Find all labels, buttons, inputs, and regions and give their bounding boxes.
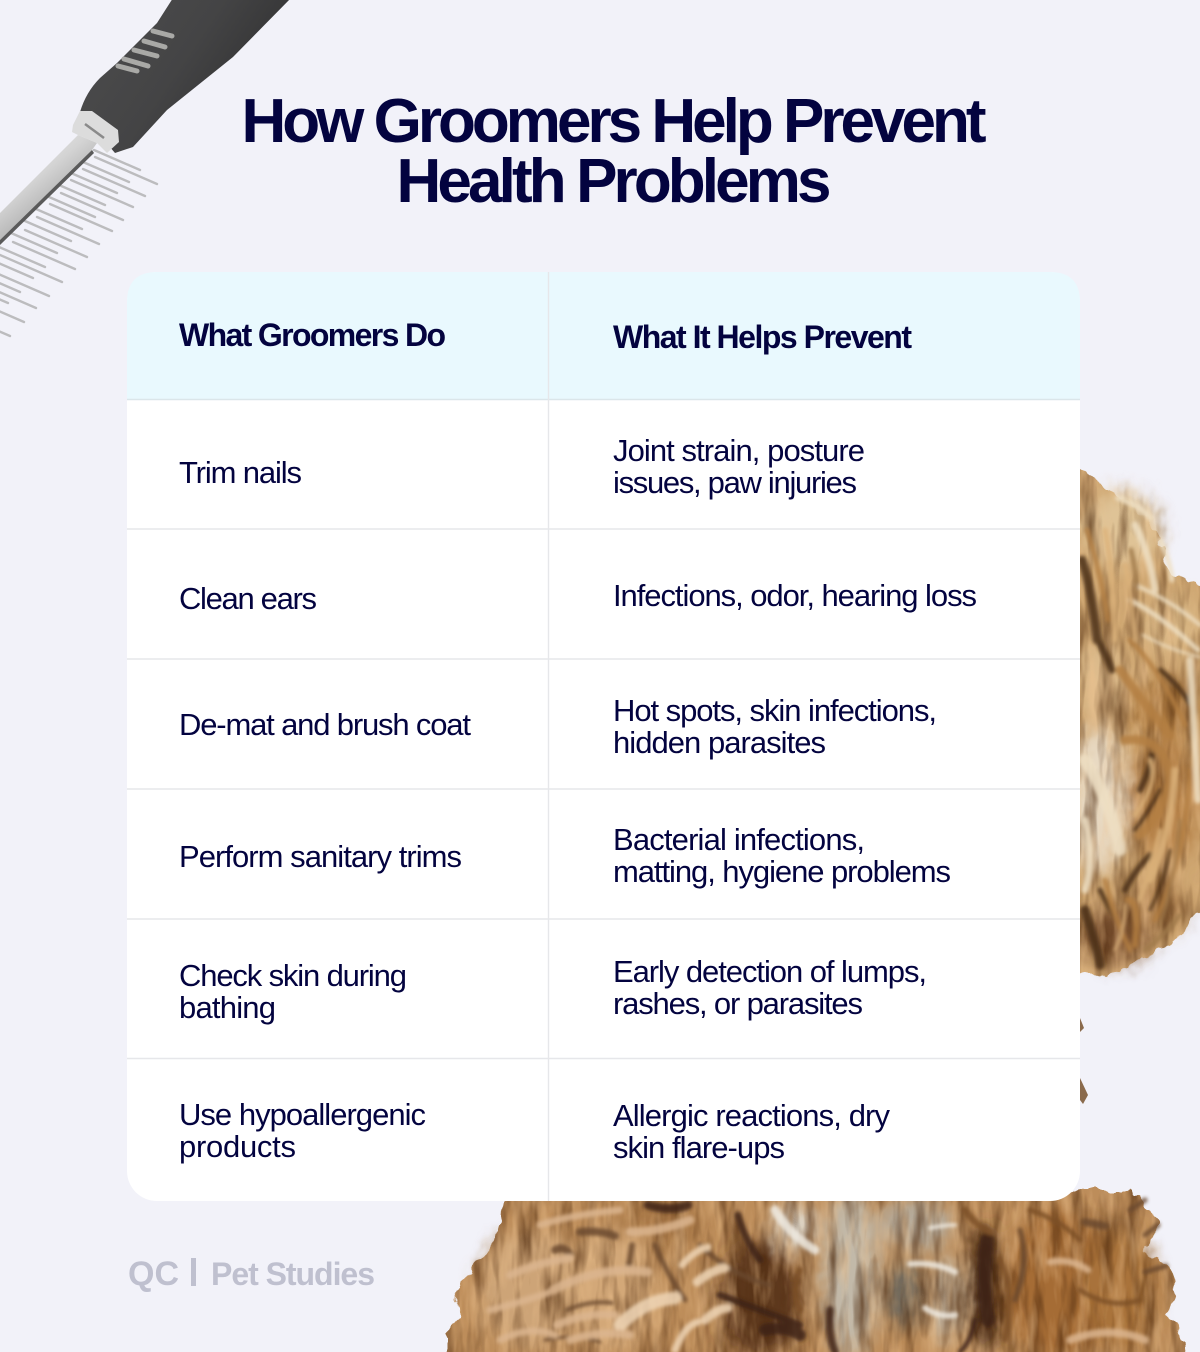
logo: QC Pet Studies [128,1255,375,1293]
title [242,87,986,216]
row: use hypoallergenic products: Allergic reactions, dry [613,1098,890,1133]
row: trim nails: Joint strain, posture [613,433,865,468]
fur tufts [1080,1018,1088,1104]
handle grip ridges [118,31,172,71]
table background [127,272,1080,1201]
table card [127,272,1080,1201]
row: clean ears: Clean ears [179,581,317,616]
table header band [127,272,1080,399]
row: trim nails: Trim nails [179,455,302,490]
row: de-mat and brush coat: De-mat and brush coat [179,707,471,742]
row: check skin during bathing: bathing [179,990,276,1025]
row: clean ears [179,578,977,616]
row: check skin during bathing: rashes, or parasites [613,986,863,1021]
dog fur: right side [1080,469,1200,1104]
logo: QC Pet Studies: Pet Studies [211,1256,375,1292]
row: trim nails: issues, paw injuries [613,465,857,500]
fur strands: right side [1082,498,1200,965]
row: clean ears: Infections, odor, hearing loss [613,578,977,613]
row: perform sanitary trims: Perform sanitary trims [179,839,462,874]
row: de-mat and brush coat: Hot spots, skin infections, [613,693,937,728]
row: use hypoallergenic products: products [179,1129,296,1164]
row: perform sanitary trims: matting, hygiene problems [613,854,951,889]
comb [0,0,291,336]
row: trim nails [179,433,865,500]
table header band: What Groomers Do [179,317,446,353]
row: de-mat and brush coat: hidden parasites [613,725,826,760]
row: check skin during bathing [179,954,927,1025]
row: use hypoallergenic products: Use hypoallergenic [179,1097,426,1132]
dog fur: bottom [445,1190,1187,1352]
row: use hypoallergenic products [179,1097,890,1165]
fur strands: bottom [490,1200,1166,1352]
row: use hypoallergenic products: skin flare-ups [613,1130,785,1165]
row: de-mat and brush coat [179,693,937,760]
row: check skin during bathing: Check skin during [179,958,407,993]
comb spine [0,135,97,240]
row: check skin during bathing: Early detection of lumps, [613,954,927,989]
logo: QC Pet Studies: QC [128,1255,179,1293]
row: perform sanitary trims [179,822,951,889]
title: Health Problems [396,147,832,216]
comb teeth [0,150,157,336]
row: perform sanitary trims: Bacterial infections, [613,822,865,857]
table header band: What It Helps Prevent [613,319,912,355]
title: How Groomers Help Prevent [242,87,986,156]
comb ferrule [72,111,119,153]
comb handle [80,0,291,153]
